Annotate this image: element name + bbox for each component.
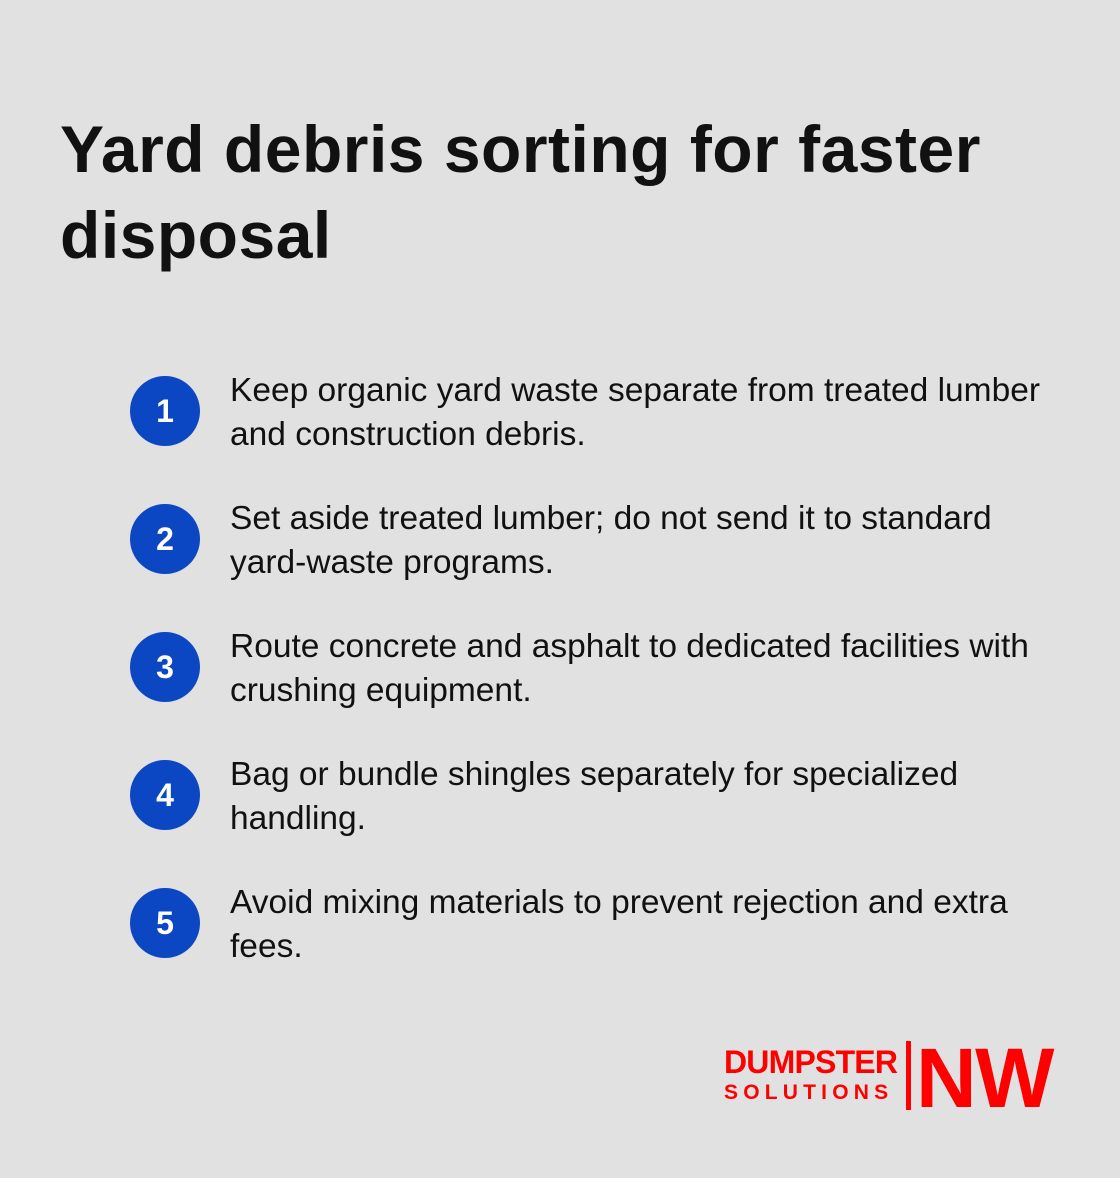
list item 1 [130, 372, 1040, 453]
list item 5: 5 [156, 905, 174, 941]
title [60, 112, 981, 272]
list item 2: 2 [156, 521, 174, 557]
list item 3: 3 [156, 649, 174, 685]
title: disposal [60, 198, 332, 272]
list item 2 [130, 500, 992, 581]
list item 4: handling. [230, 800, 366, 837]
list item 4: 4 [156, 777, 174, 813]
list item 1: and construction debris. [230, 416, 586, 453]
list item 4 [130, 756, 958, 837]
logo [724, 1031, 1054, 1125]
list item 3: crushing equipment. [230, 672, 532, 709]
logo: NW [916, 1031, 1053, 1125]
list item 4: Bag or bundle shingles separately for specialized [230, 756, 958, 793]
list item 3 [130, 628, 1029, 709]
list item 5: Avoid mixing materials to prevent rejection and extra [230, 884, 1008, 921]
title: Yard debris sorting for faster [60, 112, 981, 186]
list item 1: Keep organic yard waste separate from treated lumber [230, 372, 1040, 409]
list item 5: fees. [230, 928, 303, 965]
list item 5 [130, 884, 1008, 965]
list item 2: yard-waste programs. [230, 544, 554, 581]
list item 2: Set aside treated lumber; do not send it to standard [230, 500, 992, 537]
list item 3: Route concrete and asphalt to dedicated facilities with [230, 628, 1029, 665]
logo: SOLUTIONS [724, 1081, 893, 1104]
logo: DUMPSTER [724, 1044, 897, 1080]
list item 1: 1 [156, 393, 174, 429]
